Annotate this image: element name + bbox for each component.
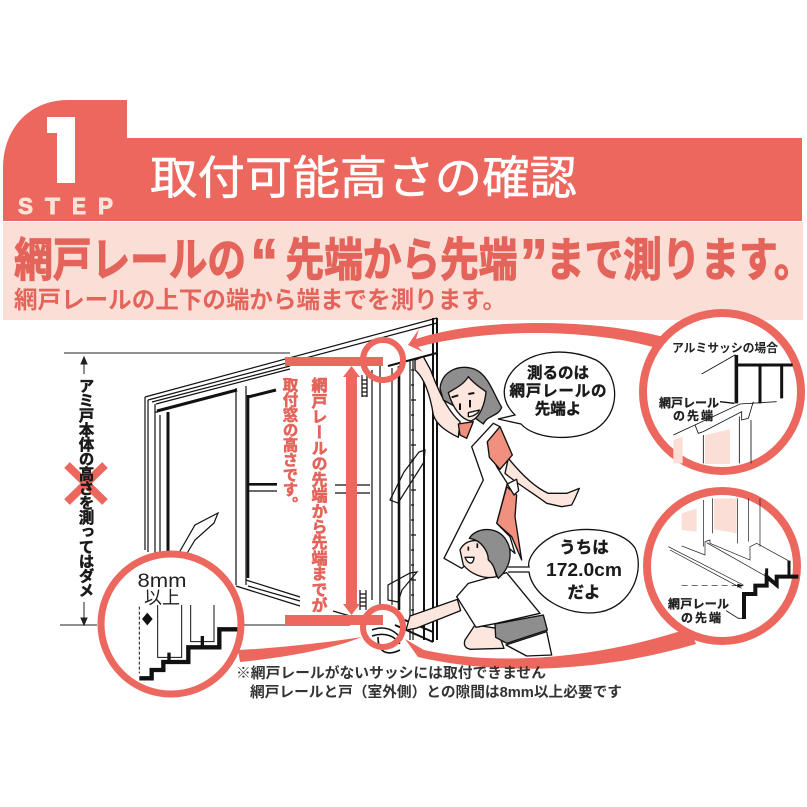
title: 取付可能高さの確認 <box>150 152 577 204</box>
main heading: まで測ります。 <box>546 235 807 286</box>
red cross mark <box>67 465 105 502</box>
speech bubble: woman <box>498 352 615 437</box>
step label: S <box>18 193 33 219</box>
inset: bottom rail <box>647 491 798 641</box>
small circle: top rail <box>363 340 403 380</box>
speech bubble: woman: 網戸レールの <box>510 382 606 400</box>
main heading: 先端から先端 <box>286 235 517 286</box>
label rail tip: 網戸レール <box>659 396 719 410</box>
step label: E <box>72 193 86 219</box>
arrow: left inset to bottom rail <box>238 637 362 662</box>
inset: 8mm gap <box>101 554 241 694</box>
step number <box>47 117 75 183</box>
label rail tip 2: の先端 <box>681 610 721 625</box>
note line 1: ※網戸レールがないサッシには取付できません <box>236 664 546 682</box>
label rail tip: 網戸レール <box>668 597 729 611</box>
small circle: bottom rail <box>363 607 403 647</box>
red vertical text: height: 取付窓の高さです。 <box>280 377 298 512</box>
speech bubble: boy: うちは <box>559 538 609 557</box>
main heading: ” <box>520 225 548 299</box>
main heading: “ <box>250 225 278 299</box>
pink subheading panel <box>3 222 807 320</box>
dimension lines <box>60 353 350 625</box>
label aluminium sash: アルミサッシの場合 <box>672 340 778 355</box>
speech bubble: boy: だよ <box>568 583 600 602</box>
speech bubble: woman: 先端よ <box>535 400 581 418</box>
label 以上: 以上 <box>144 588 180 608</box>
inset: aluminium sash top rail <box>643 313 801 471</box>
height measure lines <box>285 357 383 625</box>
speech bubble: boy: 172.0cm <box>546 560 622 580</box>
woman illustration <box>415 357 579 568</box>
speech bubble: woman: 測るのは <box>527 364 589 382</box>
arrow: top inset to top rail <box>408 323 664 352</box>
step label: P <box>98 193 113 219</box>
boy illustration <box>406 530 552 656</box>
vertical warning text: アミ戸本体の高さを測ってはダメ <box>76 378 94 598</box>
label 8mm: 8mm <box>138 571 186 592</box>
window illustration <box>145 318 437 653</box>
red vertical text: rail: 網戸レールの先端から先端までが <box>308 377 328 613</box>
main heading: 網戸レールの <box>14 235 246 286</box>
label rail tip 2: の先端 <box>673 408 713 423</box>
note line 2: 網戸レールと戸（室外側）との隙間は8mm以上必要です <box>250 683 622 701</box>
arrow: bottom inset to bottom rail <box>405 628 696 669</box>
speech bubble: boy <box>508 529 638 613</box>
header band with step tab <box>3 100 802 221</box>
step number: 1 <box>37 102 87 203</box>
step label <box>18 193 113 219</box>
sub heading: 網戸レールの上下の端から端までを測ります。 <box>14 287 506 314</box>
step label: T <box>45 193 60 219</box>
